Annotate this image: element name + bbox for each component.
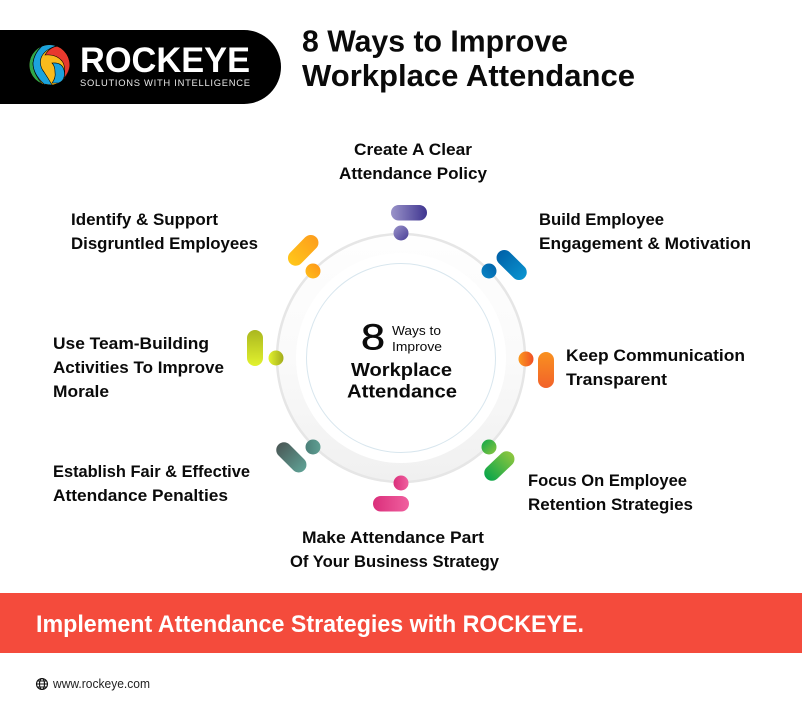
label: disgruntled — [71, 211, 258, 253]
label: business strategy: Make Attendance Part — [302, 529, 485, 547]
center text: 8 — [361, 316, 385, 358]
label: penalties — [53, 463, 250, 505]
center text — [347, 316, 457, 402]
label: engagement — [539, 211, 751, 253]
marker: upper right — [482, 258, 519, 278]
icon: globe — [36, 678, 48, 690]
marker: lower left — [284, 440, 320, 465]
label: penalties: Attendance Penalties — [53, 487, 228, 505]
marker: bottom — [373, 476, 409, 512]
banner — [0, 593, 802, 653]
label: team building: Activities To Improve — [53, 359, 224, 377]
logo wordmark: ROCKEYE — [80, 41, 250, 80]
center text: Ways to — [392, 323, 441, 338]
marker: lower right — [482, 440, 507, 473]
label: disgruntled: Disgruntled Employees — [71, 235, 258, 253]
center text: Attendance — [347, 380, 457, 402]
logo tagline: SOLUTIONS WITH INTELLIGENCE — [80, 77, 250, 88]
label: communication: Transparent — [566, 371, 668, 389]
banner: Implement Attendance Strategies with ROCKEYE. — [36, 611, 584, 638]
footer website: www.rockeye.com — [52, 676, 150, 691]
marker: upper left — [296, 243, 320, 278]
label: retention — [528, 472, 693, 514]
label: create policy: Create A Clear — [354, 141, 473, 159]
label: team building: Use Team-Building — [53, 335, 209, 353]
marker: top — [391, 205, 427, 240]
label: business strategy: Of Your Business Strategy — [290, 553, 500, 571]
label: penalties: Establish Fair & Effective — [53, 463, 250, 481]
label: team building — [53, 335, 224, 401]
label: team building: Morale — [53, 383, 109, 401]
label: disgruntled: Identify & Support — [71, 211, 219, 229]
label: retention: Focus On Employee — [528, 472, 687, 490]
label: engagement: Engagement & Motivation — [539, 235, 751, 253]
label: communication: Keep Communication — [566, 347, 745, 365]
title: 8 Ways to Improve — [302, 24, 568, 58]
marker: right — [518, 352, 554, 388]
title — [302, 24, 635, 93]
icon: logo swirl — [30, 45, 70, 85]
logo badge — [0, 30, 281, 104]
label: engagement: Build Employee — [539, 211, 664, 229]
central ring diagram — [247, 205, 554, 512]
center text: Improve — [392, 339, 442, 354]
marker: left — [247, 330, 284, 366]
label: create policy — [339, 141, 488, 183]
label: communication — [566, 347, 745, 389]
label: business strategy — [290, 529, 500, 571]
title: Workplace Attendance — [302, 58, 635, 93]
center text: Workplace — [351, 359, 452, 380]
label: create policy: Attendance Policy — [339, 165, 488, 183]
label: retention: Retention Strategies — [528, 496, 693, 514]
